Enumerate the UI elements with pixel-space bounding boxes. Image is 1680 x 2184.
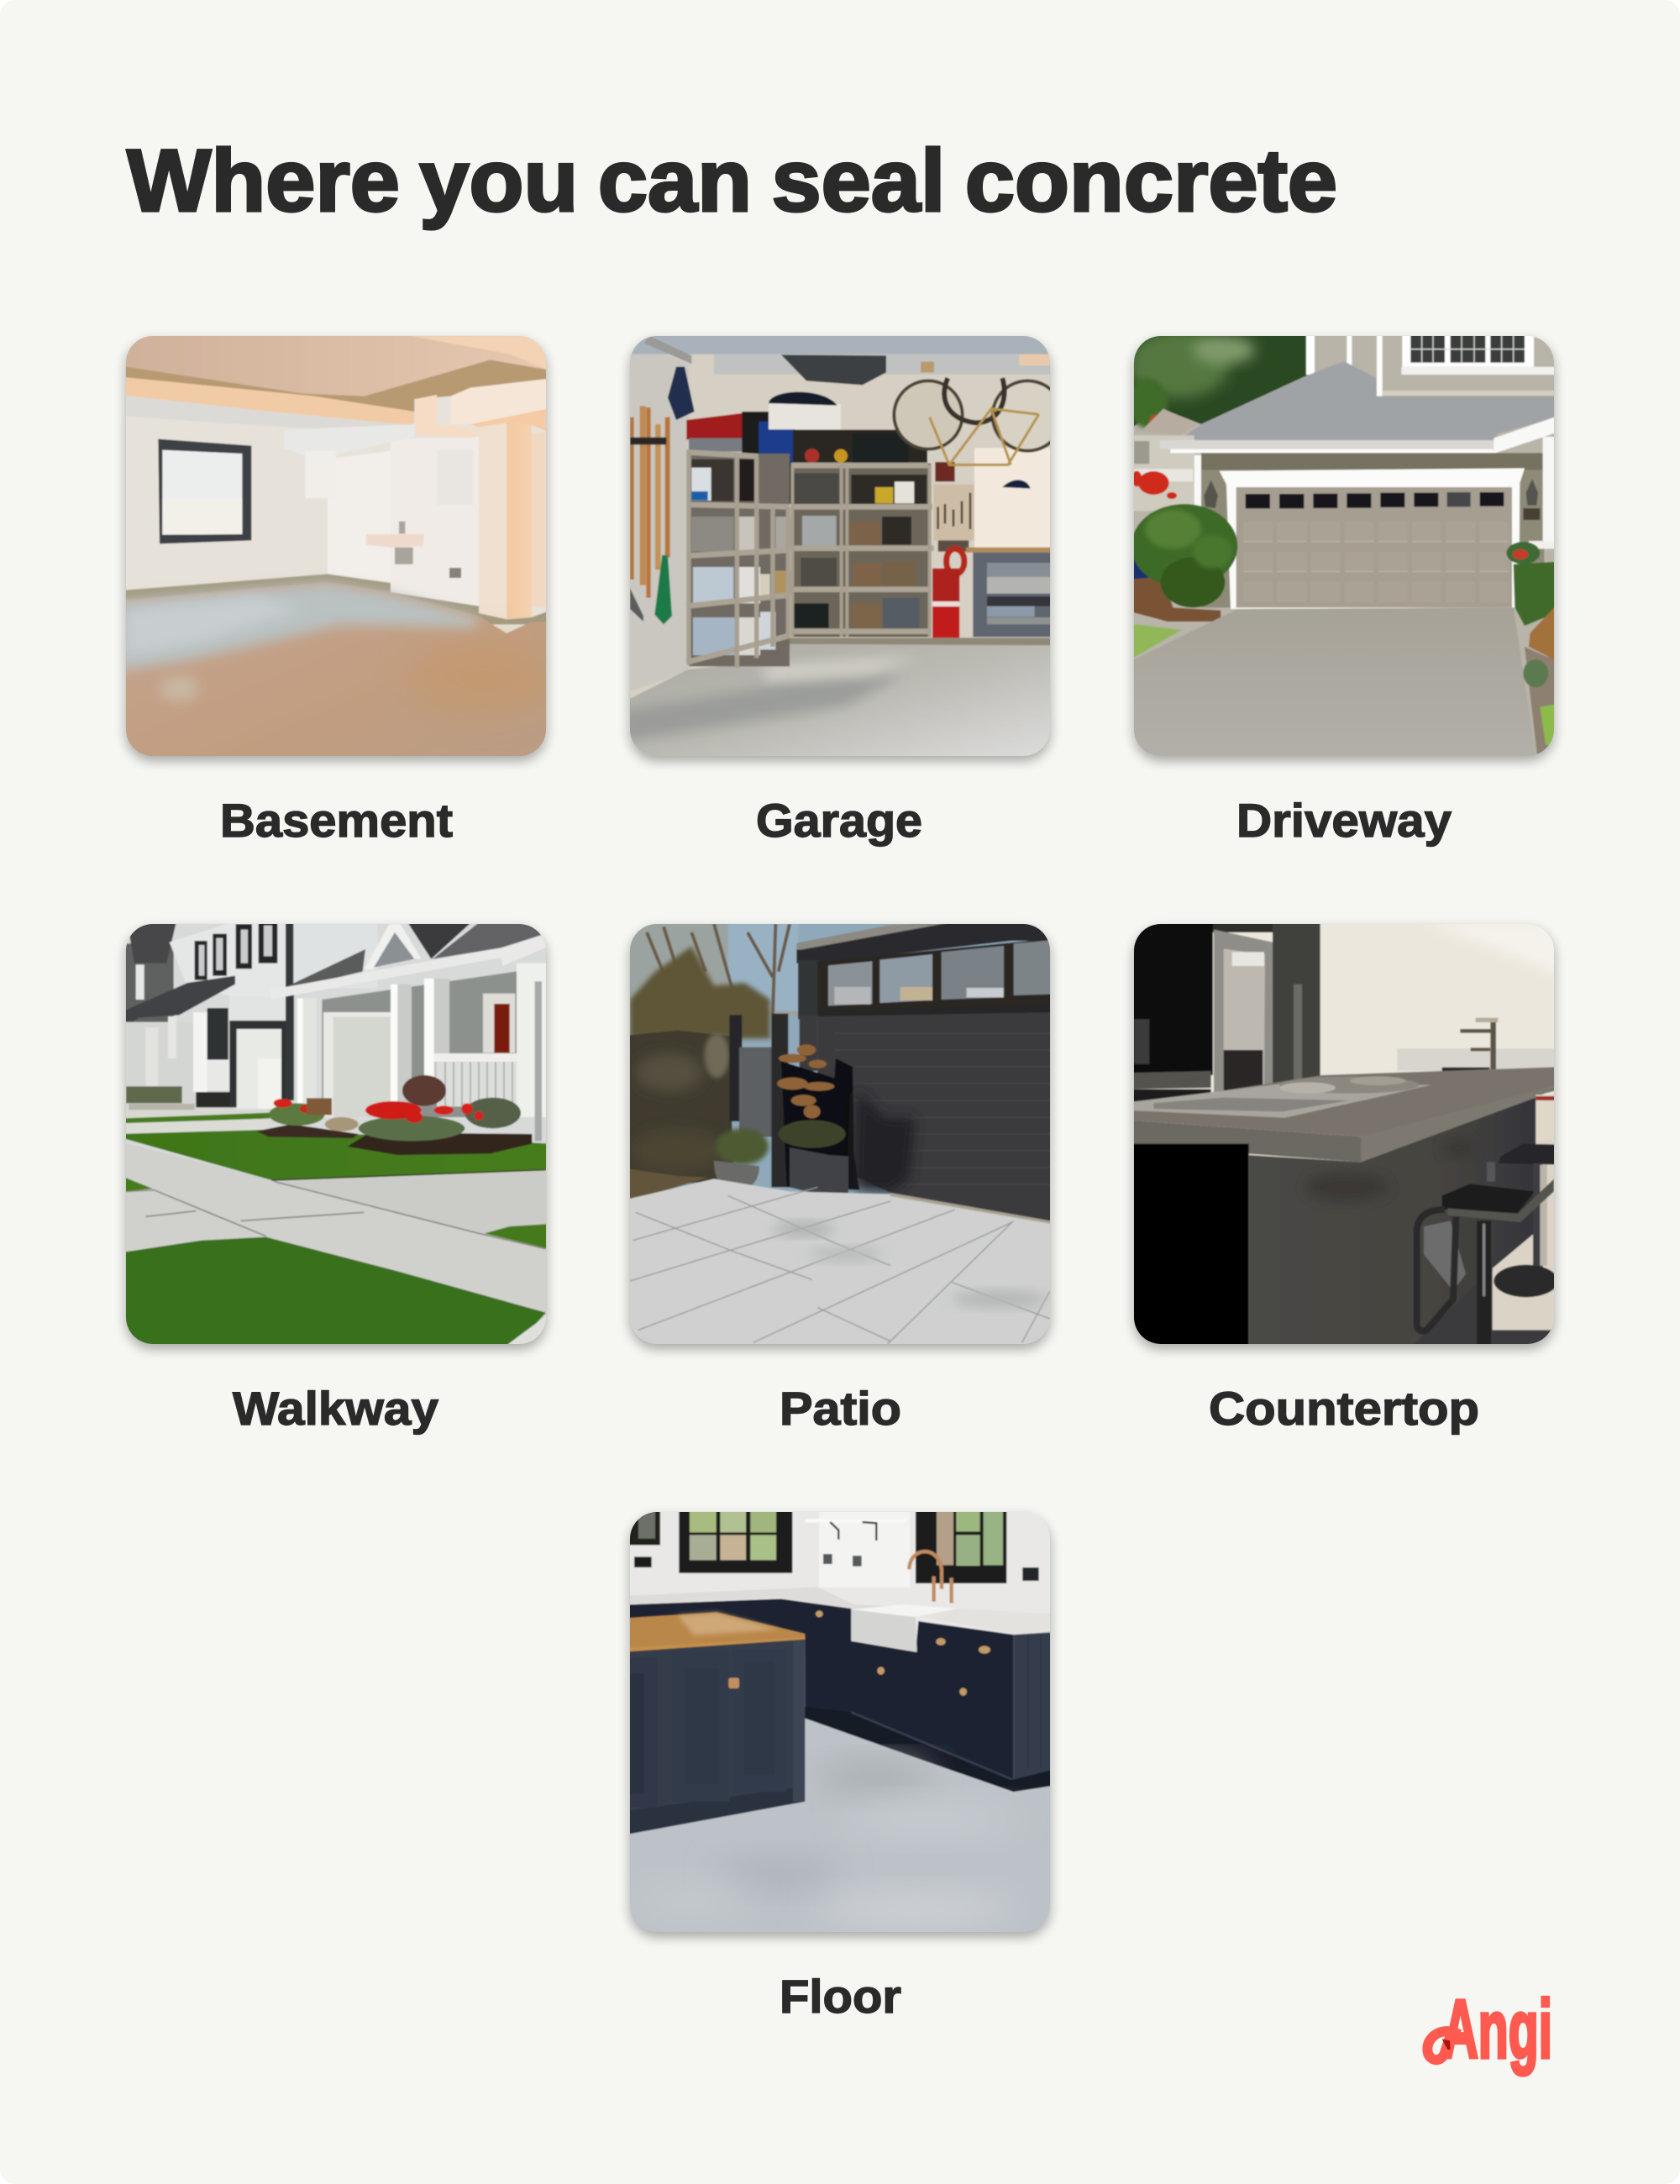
concrete floor [622,1718,1058,1940]
label: Floor: Floor [780,1970,901,2023]
card: Countertop [1126,916,1565,1435]
paving slabs [622,1179,1058,1352]
worktop [622,1587,1058,1634]
bare trees [622,916,798,1039]
red storage box [685,412,743,440]
lawn upper [118,1130,554,1180]
photo: concrete countertop kitchen [1126,916,1565,1352]
driveway surface [1126,607,1537,764]
brass tap [909,1551,952,1603]
wash basin [366,522,424,564]
card: Driveway [1126,328,1562,847]
base cabinets [622,1599,1058,1792]
logo: Angi: Angi [1442,1983,1552,2076]
basement window [158,439,251,543]
basement floor [118,582,554,764]
hedge [622,1031,733,1204]
tree foliage [1134,336,1308,430]
card: Walkway [118,916,554,1435]
photo: patio beside dark brick wall [622,916,1058,1352]
building fascia [796,921,1058,963]
clerestory windows [817,938,1058,1014]
brick wall [817,1005,1058,1224]
lanterns [1204,480,1218,508]
upstairs window [1410,333,1525,363]
photo: basement interior [118,328,554,764]
photo: walkway through lawns [118,916,554,1352]
logo: Angi [1427,1983,1552,2076]
near house [270,916,554,1141]
concrete walkway [118,1141,554,1352]
shelf [805,1519,906,1522]
floor [630,643,1050,756]
rear stool [1487,1144,1562,1297]
cooktop [1126,1076,1431,1118]
label: Driveway: Driveway [1236,794,1452,847]
flower beds [256,1075,532,1155]
card: Basement [118,328,554,847]
window glow [974,448,1058,549]
left mulch and blue pot [1126,543,1152,581]
photo: kitchen with concrete floor [622,1504,1058,1940]
shrub [1131,504,1237,607]
label: Garage: Garage [756,794,922,847]
card: Patio [622,916,1058,1435]
island panels [1126,1144,1249,1352]
windows [622,1504,1006,1583]
blue cooler [759,422,793,462]
potted plants [714,1044,848,1197]
bikes [894,378,1063,465]
farmhouse sink [851,1609,917,1652]
front stool [1417,1179,1554,1352]
photo: garage with shelves and bikes [622,328,1063,764]
island [622,1612,805,1835]
right hedge and plants [1506,542,1562,764]
far floor [1536,1095,1564,1142]
card: Garage [622,328,1063,847]
label: Patio: Patio [780,1382,901,1435]
oven tower [1214,930,1302,1092]
counter top [1126,1067,1562,1137]
label: Basement: Basement [220,794,453,847]
garage door [1220,468,1525,609]
pegboard and hose [934,462,974,552]
left shelving [686,451,798,668]
house roof [1179,361,1562,440]
workbench [966,548,1060,637]
label: Countertop: Countertop [1209,1382,1479,1435]
red flowers [1131,471,1177,499]
upper strips [118,1110,275,1120]
backsplash and faucet [1397,1048,1565,1071]
photo: driveway and garage door [1126,328,1562,764]
back shelving [791,433,934,637]
hanging tools [630,367,695,624]
card: Floor [622,1504,1058,2023]
lawn foreground [118,1237,546,1352]
title: Where you can seal concrete [127,132,1337,230]
fence posts and panel [729,1014,916,1193]
label: Walkway: Walkway [233,1382,438,1435]
far houses [118,916,294,1110]
